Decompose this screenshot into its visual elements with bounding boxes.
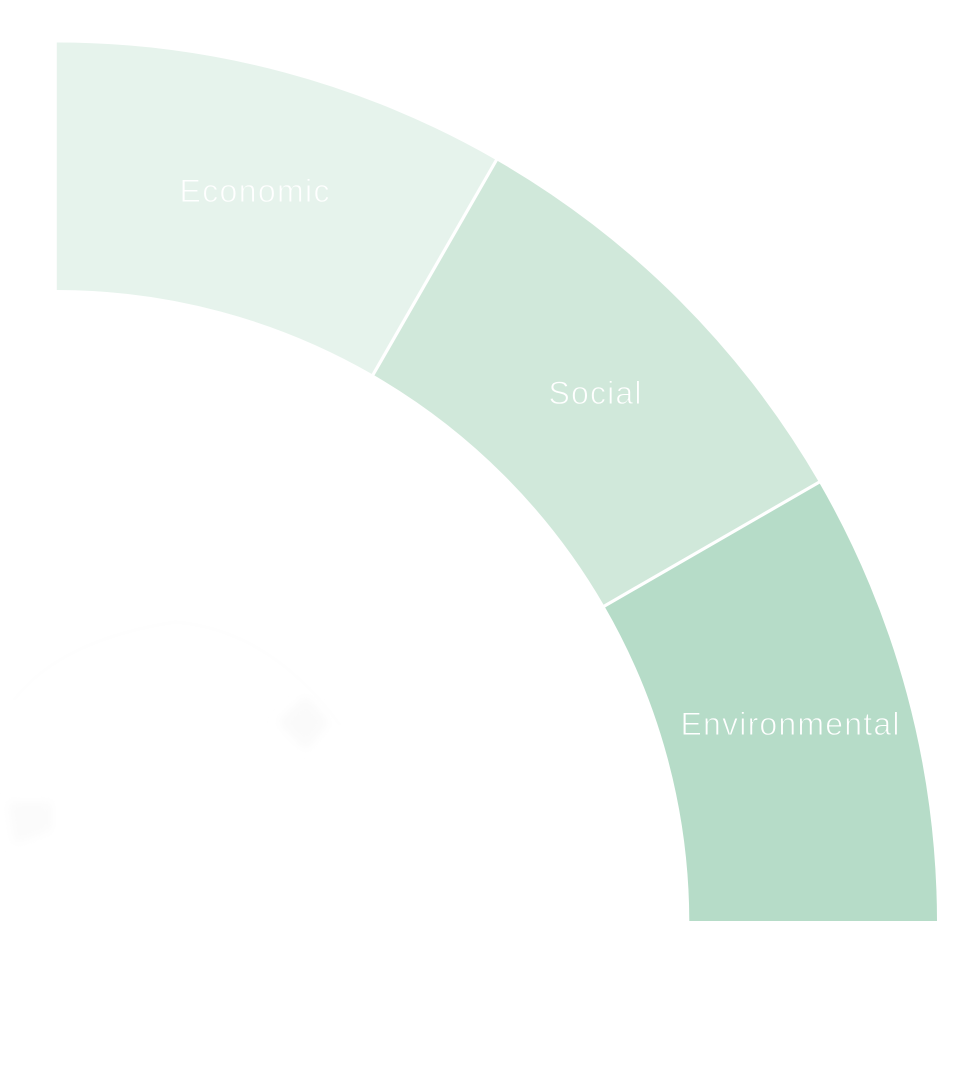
segment: Economic (57, 42, 497, 375)
faint smudge: centre right (278, 696, 329, 750)
band: Economic (57, 42, 497, 375)
band: Social (373, 160, 819, 606)
band: Environmental (604, 482, 937, 921)
label: Economic: Economic (180, 173, 330, 209)
faint smudge: lower left (8, 802, 52, 844)
faint arch outline (14, 622, 340, 725)
segment: Social (373, 160, 819, 606)
label: Social: Social (548, 375, 642, 411)
label: Environmental: Environmental (680, 706, 900, 742)
segment: Environmental (604, 482, 937, 921)
